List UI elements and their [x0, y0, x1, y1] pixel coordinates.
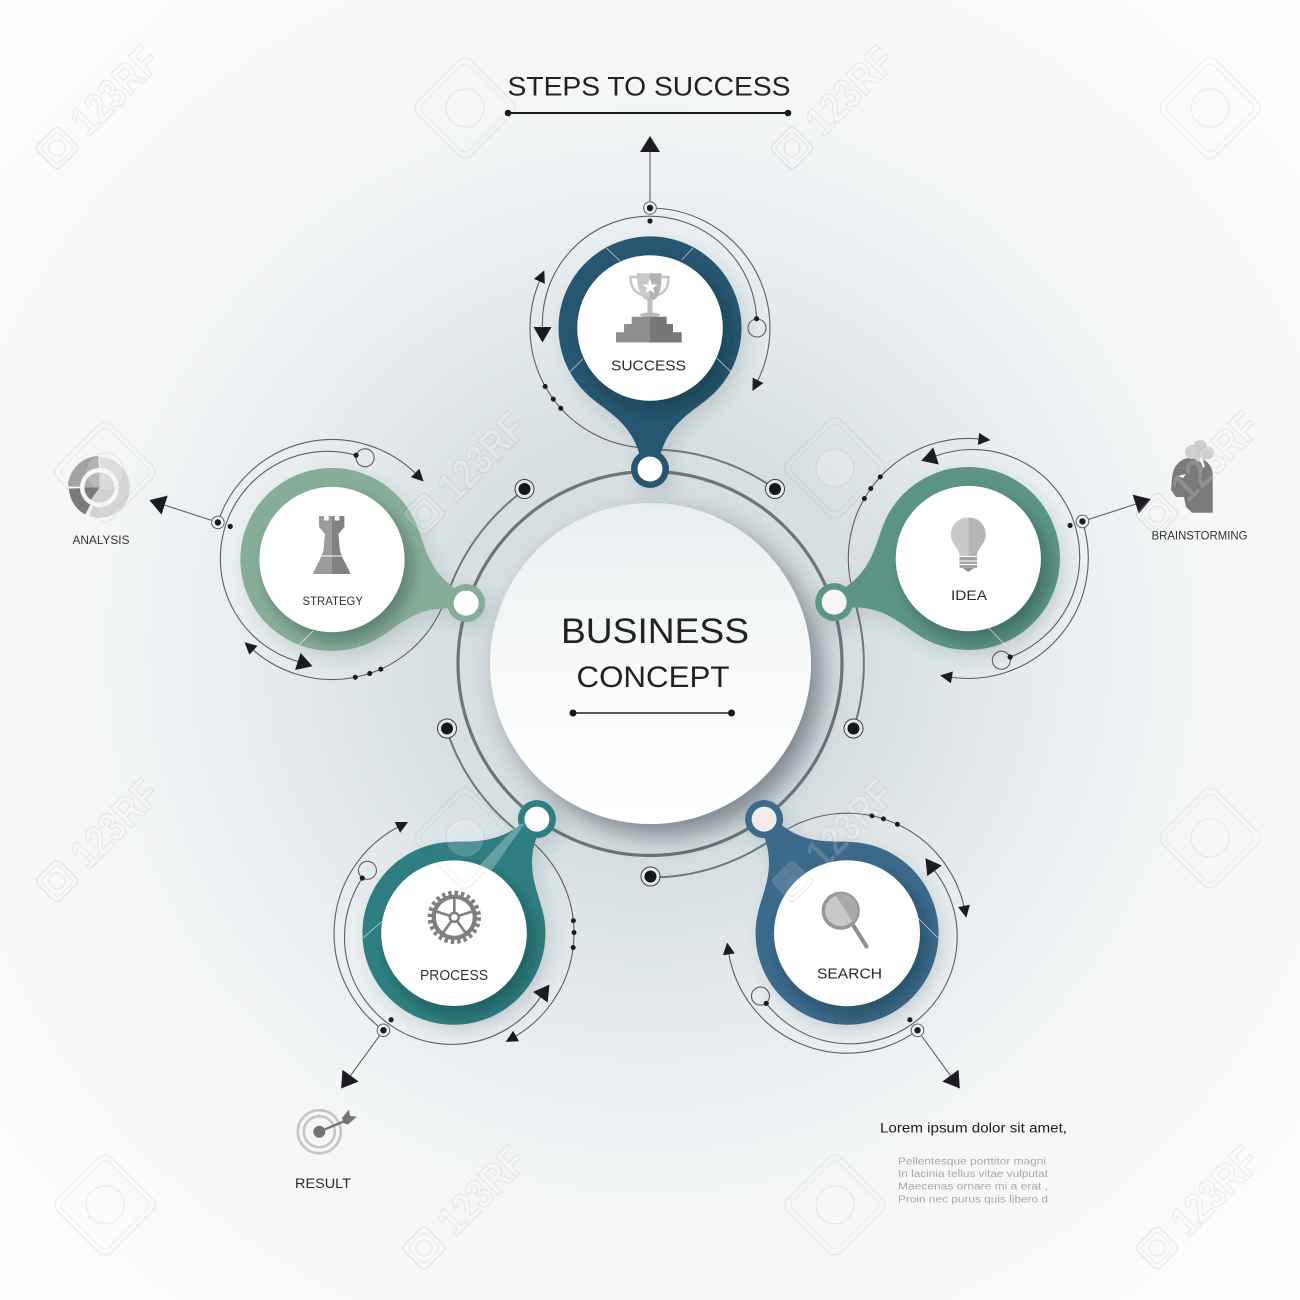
disc: idea: [896, 486, 1041, 631]
label: idea: IDEA: [951, 587, 988, 603]
central ring: [458, 472, 842, 856]
watermark overlay: 123RF: [428, 403, 536, 510]
text block body: Pellentesque porttitor magni: [898, 1156, 1046, 1168]
label: analysis: ANALYSIS: [72, 535, 130, 547]
watermark overlay: 123RF: [796, 37, 904, 144]
icon: gear: [430, 893, 478, 942]
icon: target with dart: [298, 1110, 357, 1153]
panel: success: [530, 136, 770, 488]
disc: search: [774, 860, 920, 1006]
heading: concept: CONCEPT: [576, 661, 730, 694]
watermark overlay: 123RF: [1161, 403, 1269, 510]
label: brainstorming: BRAINSTORMING: [1152, 530, 1248, 542]
orbit: strategy: [112, 386, 483, 711]
central disc: [490, 503, 811, 824]
panel: strategy: [112, 386, 512, 711]
title underline: [505, 110, 791, 116]
watermark overlay: 123RF: [1161, 1137, 1269, 1244]
central underline: [570, 710, 735, 716]
pin: process: [326, 750, 622, 1061]
icon: chess rook: [313, 516, 350, 574]
result item: [295, 1110, 357, 1191]
icon: brainstorming head: [1171, 440, 1214, 513]
pin: success: [558, 236, 742, 488]
icon: analysis donut: [74, 462, 124, 512]
pin: strategy: [217, 444, 512, 696]
watermark overlay: 123RF: [61, 770, 169, 877]
orbit: idea: [818, 385, 1188, 710]
text block body: [898, 1156, 1048, 1206]
analysis item: [72, 462, 130, 547]
connector terminal nodes: [438, 480, 863, 886]
brainstorming item: [1152, 440, 1248, 542]
disc: success: [577, 255, 723, 401]
label: search: SEARCH: [817, 966, 882, 982]
disc: strategy: [259, 487, 405, 632]
connector arcs around central hub: [446, 449, 864, 878]
watermark overlay: 123RF: [796, 770, 904, 877]
label: process: PROCESS: [420, 968, 488, 984]
text block heading: Lorem ipsum dolor sit amet,: [880, 1120, 1067, 1136]
label: result: RESULT: [295, 1175, 351, 1191]
watermark overlay: 123RF: [61, 37, 169, 144]
panel: search: [679, 750, 1057, 1159]
orbit: process: [244, 766, 621, 1159]
heading: business: BUSINESS: [561, 612, 749, 651]
panel: process: [244, 750, 622, 1159]
label: success: SUCCESS: [611, 358, 686, 374]
text block body: Proin nec purus quis libero d: [898, 1194, 1048, 1206]
pin: idea: [788, 443, 1084, 695]
icon: light bulb: [951, 518, 986, 572]
text block body: In lacinia tellus vitae vulputat: [898, 1168, 1048, 1180]
label: strategy: STRATEGY: [302, 595, 363, 608]
disc: process: [381, 860, 527, 1006]
text block body: Maecenas ornare mi a erat ,: [898, 1180, 1048, 1192]
panel: idea: [788, 385, 1188, 710]
orbit: search: [680, 766, 1057, 1159]
title: STEPS TO SUCCESS: [508, 72, 790, 102]
pin: search: [679, 750, 975, 1061]
watermark overlay: 123RF: [428, 1137, 536, 1244]
orbit: success: [530, 136, 770, 448]
icon: magnifier: [823, 893, 866, 946]
icon: trophy: [616, 273, 682, 342]
